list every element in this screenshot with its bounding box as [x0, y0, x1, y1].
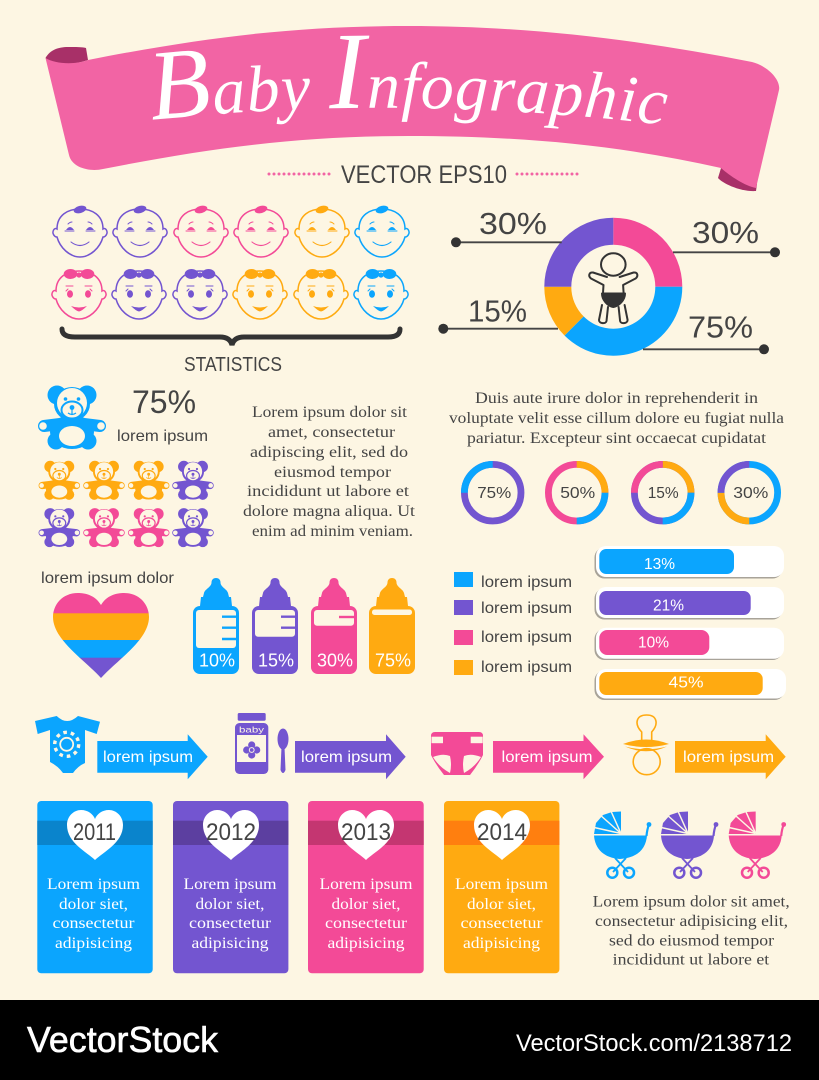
middle paragraph: Lorem ipsum dolor sit [252, 404, 408, 421]
statistics label: STATISTICS [184, 354, 282, 376]
baby bottles [193, 578, 415, 674]
stroller paragraph: Lorem ipsum dolor sit amet, [593, 894, 790, 911]
large teddy bear [39, 386, 105, 450]
arrow 4 [675, 734, 786, 779]
card 2014: Lorem ipsum [455, 876, 549, 893]
right paragraph: Duis aute irure dolor in reprehenderit in [475, 390, 758, 407]
bottle 10%: 10% [199, 651, 235, 671]
progress bars [594, 546, 786, 700]
ribbon banner [46, 26, 779, 191]
icons: strollers [592, 809, 786, 878]
callout values: 30% [479, 206, 547, 241]
right paragraph: voluptate velit esse cillum dolore eu fugiat nulla [449, 410, 784, 427]
arrow 2: lorem ipsum [301, 749, 392, 766]
footer bar: VectorStock [27, 1019, 219, 1060]
arrow 3 [493, 734, 604, 779]
card 2012: dolor siet, [196, 896, 264, 913]
subtitle: VECTOR EPS10 [341, 161, 507, 189]
footer bar [0, 1000, 819, 1080]
legend: lorem ipsum [481, 659, 572, 676]
bar 10%: 10% [638, 635, 669, 652]
callout values: 15% [468, 294, 527, 328]
teddy stat: lorem ipsum [117, 428, 208, 445]
card 2012: consectetur [189, 915, 272, 932]
card 2011: 2011 [73, 819, 116, 846]
bar 10% [594, 628, 784, 660]
ring 15%: 15% [648, 485, 679, 502]
ring 50%: 50% [560, 485, 595, 502]
small teddy bears [39, 461, 213, 547]
card 2011: dolor siet, [59, 896, 128, 913]
card 2011: consectetur [52, 915, 135, 932]
arrow 1 [97, 734, 208, 779]
ring 15% [634, 464, 691, 521]
card 2013: Lorem ipsum [320, 876, 413, 893]
bottle 10% [193, 578, 239, 674]
card 2012: Lorem ipsum [184, 876, 277, 893]
donut chart with baby [438, 206, 780, 356]
card 2014: adipisicing [463, 935, 540, 952]
legend [454, 572, 572, 676]
bar 13% [594, 546, 784, 578]
card 2014 [444, 801, 559, 973]
card 2012 [173, 801, 288, 973]
bottle 30%: 30% [317, 651, 353, 671]
card 2013: 2013 [341, 819, 391, 846]
middle paragraph: amet, consectetur [268, 424, 396, 441]
donut segments [544, 218, 682, 356]
bottle 75%: 75% [375, 651, 411, 671]
card 2013: consectetur [325, 915, 408, 932]
teddy stat: 75% [132, 384, 196, 420]
middle paragraph: enim ad minim veniam. [252, 523, 413, 540]
bar 21% [594, 587, 784, 620]
bottle 15%: 15% [258, 651, 294, 671]
bar 21%: 21% [653, 598, 684, 615]
card 2014: dolor siet, [467, 896, 536, 913]
card 2011: adipisicing [55, 935, 132, 952]
bottle 75% [369, 578, 415, 674]
right paragraph: pariatur. Excepteur sint occaecat cupidatat [467, 430, 767, 447]
card 2014: consectetur [460, 915, 543, 932]
small ring charts [464, 464, 778, 521]
callout lines [438, 237, 780, 354]
ring 30%: 30% [733, 485, 768, 502]
icon: baby [589, 253, 637, 323]
card 2011 [37, 801, 153, 973]
striped heart [53, 593, 149, 678]
heart label: lorem ipsum dolor [41, 570, 175, 587]
legend: lorem ipsum [481, 600, 572, 617]
card 2014: 2014 [477, 819, 527, 846]
middle paragraph: eiusmod tempor [274, 464, 392, 481]
icon: baby food jar and spoon [235, 713, 288, 774]
ring 30% [721, 464, 778, 521]
stroller paragraph: consectetur adipisicing elit, [595, 913, 788, 930]
baby faces statistics [52, 204, 409, 319]
callout values [468, 206, 759, 344]
stroller paragraph [593, 894, 790, 969]
arrow 3: lorem ipsum [502, 749, 592, 766]
ring 75%: 75% [477, 485, 511, 502]
middle paragraph: incididunt ut labore et [247, 483, 410, 500]
icon: pacifier [623, 715, 669, 775]
stroller paragraph: incididunt ut labore et [613, 952, 770, 969]
card 2013 [308, 801, 424, 973]
icon: baby food jar and spoon: baby [239, 724, 265, 734]
arrow 1: lorem ipsum [103, 749, 193, 766]
arrow 2 [295, 734, 406, 779]
bottle 15% [252, 578, 298, 674]
middle paragraph: dolore magna aliqua. Ut [243, 503, 416, 520]
bar 13%: 13% [644, 556, 675, 573]
stroller paragraph: sed do eiusmod tempor [609, 933, 775, 950]
card 2012: 2012 [206, 819, 256, 846]
ring 75% [464, 464, 521, 521]
bar 45% [594, 669, 786, 700]
legend: lorem ipsum [481, 574, 572, 591]
brace [62, 329, 400, 345]
icon: diaper [431, 732, 483, 775]
icon: onesie [35, 716, 100, 773]
teddy stat [117, 384, 208, 445]
card 2013: adipisicing [328, 935, 404, 952]
ring 50% [548, 464, 605, 521]
legend: lorem ipsum [481, 629, 572, 646]
footer bar: VectorStock.com/2138712 [516, 1030, 792, 1057]
middle paragraph: adipiscing elit, sed do [250, 444, 408, 461]
bottle 30% [311, 578, 357, 674]
card 2011: Lorem ipsum [47, 876, 141, 893]
arrow 4: lorem ipsum [683, 749, 774, 766]
callout values: 75% [688, 310, 753, 344]
right paragraph [449, 390, 784, 447]
callout values: 30% [692, 215, 759, 250]
card 2012: adipisicing [192, 935, 268, 952]
title: Baby Infographic [152, 36, 668, 129]
bar 45%: 45% [668, 675, 704, 692]
middle paragraph [243, 404, 416, 540]
card 2013: dolor siet, [332, 896, 400, 913]
